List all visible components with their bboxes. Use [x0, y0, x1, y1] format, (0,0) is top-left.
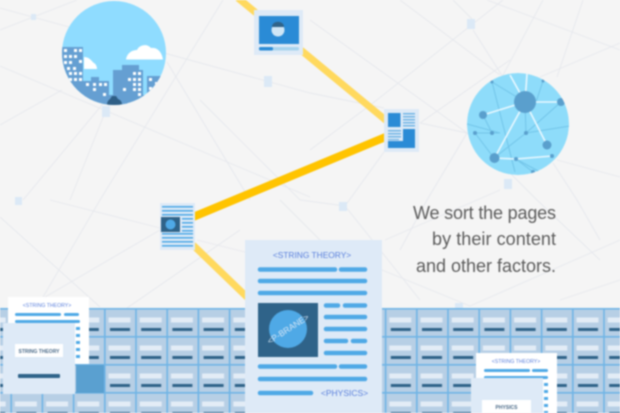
illustration: network globe	[467, 73, 570, 175]
stacked document: string theory: <STRING THEORY>	[23, 303, 71, 309]
image: p-brane	[258, 303, 318, 357]
highlighted cell	[76, 365, 104, 393]
illustration: city circle	[62, 1, 166, 105]
clouds	[84, 45, 163, 69]
image: p-brane: <P-BRANE>	[265, 312, 311, 346]
index grid of cells	[0, 308, 620, 413]
white highlighted edges	[483, 74, 561, 159]
thin network edges	[467, 81, 570, 172]
text bars	[260, 270, 365, 393]
stacked document: physics: PHYSICS	[496, 405, 518, 411]
stacked document: string theory: STRING THEORY	[19, 349, 60, 355]
thumbnail: layout page	[384, 109, 419, 152]
yellow connection lines	[193, 0, 388, 300]
car	[107, 96, 122, 105]
main document: <PHYSICS>	[321, 388, 368, 398]
network nodes	[473, 80, 565, 174]
caption text: We sort the pages	[413, 203, 556, 223]
building windows	[64, 49, 158, 96]
caption text: by their content	[432, 229, 556, 249]
caption text	[413, 203, 556, 276]
small page nodes	[15, 14, 512, 308]
stacked document: physics: <STRING THEORY>	[492, 359, 540, 365]
thumbnail: video page	[254, 10, 303, 55]
icon: face	[272, 22, 284, 36]
thumbnail: article page	[160, 203, 195, 250]
stacked document: physics	[471, 353, 557, 413]
network background lines	[0, 0, 620, 308]
buildings	[62, 47, 166, 105]
main document: <STRING THEORY>	[273, 250, 351, 260]
main document	[245, 240, 382, 413]
stacked document: string theory	[3, 297, 89, 394]
caption text: and other factors.	[416, 256, 556, 276]
